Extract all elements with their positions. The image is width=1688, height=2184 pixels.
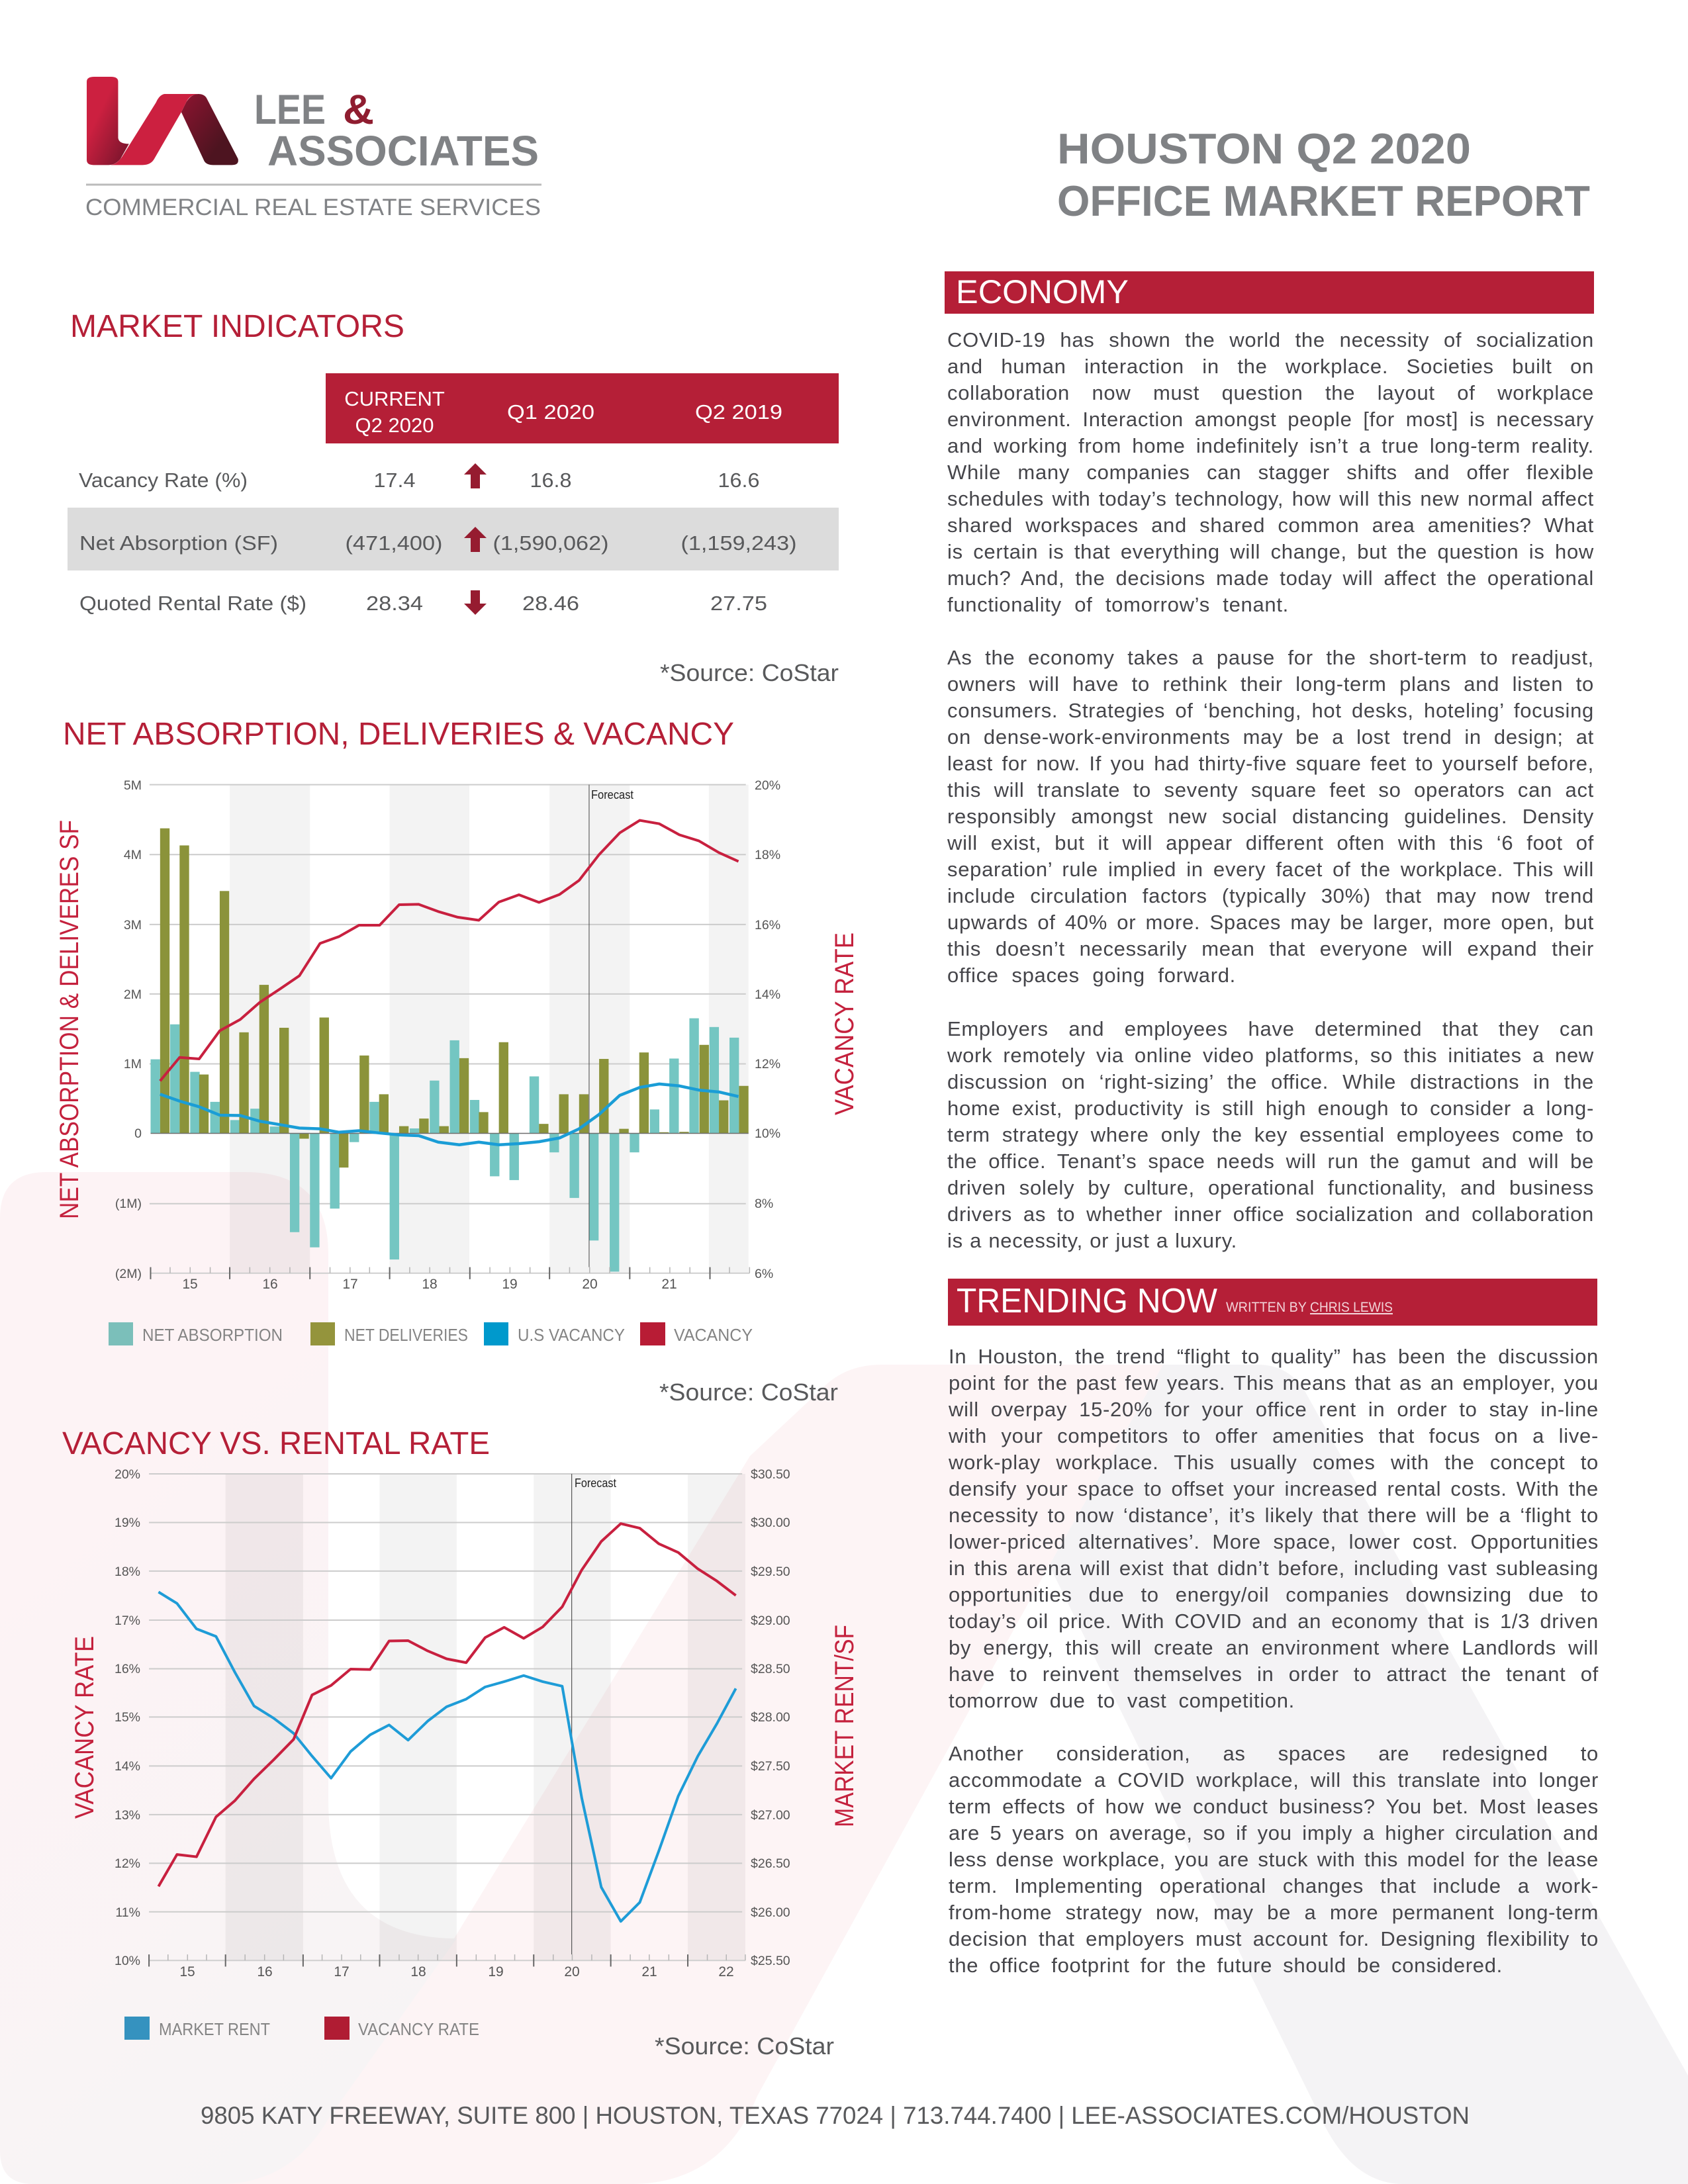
legend: VACANCY [674, 1325, 753, 1345]
text block: economy paragraph 3: term strategy where only the key essential employees come to [947, 1123, 1594, 1146]
left axis labels: 5M [124, 778, 142, 793]
left axis labels: 15% [115, 1710, 140, 1725]
text block: economy paragraph 1: much? And, the decisions made today will affect the operational [947, 567, 1594, 590]
text block: trending now paragraph 2: accommodate a COVID workplace, will this translate into longer [949, 1768, 1599, 1792]
text block: economy paragraph 1: collaboration now must question the layout of workplace [947, 381, 1594, 404]
text block: trending now paragraph 2: Another consideration, as spaces are redesigned to [949, 1742, 1599, 1765]
legend [109, 1322, 753, 1345]
row: net absorption [68, 508, 839, 570]
text block: trending now paragraph 2: term effects of how we conduct business? You bet. Most leases [949, 1795, 1599, 1818]
left axis labels [115, 1467, 140, 1968]
heading: vacancy vs rental rate: VACANCY VS. RENTAL RATE [62, 1426, 490, 1461]
section bar: trending now [948, 1279, 1597, 1326]
year labels: 19 [488, 1964, 504, 1979]
logo: Lee & Associates: COMMERCIAL REAL ESTATE SERVICES [85, 195, 541, 220]
row: quoted rental rate: 28.34 [366, 592, 423, 615]
year labels: 20 [564, 1964, 580, 1979]
row: net absorption: (1,159,243) [680, 531, 797, 555]
text block: economy paragraph 3: discussion on ‘right-sizing’ the office. While distractions in the [947, 1070, 1594, 1093]
right axis labels: $28.50 [751, 1662, 790, 1676]
left axis labels: 1M [124, 1057, 142, 1071]
left axis labels: 12% [115, 1856, 140, 1871]
table header row: Q1 2020 [507, 400, 594, 424]
axis ticks [149, 1954, 745, 1966]
logo: Lee & Associates: ASSOCIATES [267, 127, 539, 175]
text block: trending now paragraph 1: have to reinvent themselves in order to attract the tenant of [949, 1662, 1599, 1686]
row: quoted rental rate: Quoted Rental Rate ($) [79, 592, 306, 615]
section bar: trending now: WRITTEN BY [1226, 1300, 1307, 1315]
text block: trending now paragraph 1: tomorrow due to vast competition. [949, 1689, 1295, 1712]
footer contact line: 9805 KATY FREEWAY, SUITE 800 | HOUSTON, TEXAS 77024 | 713.744.7400 | LEE-ASSOCIATES.COM/HOUSTON [201, 2101, 1470, 2129]
legend: VACANCY RATE [358, 2019, 479, 2039]
source note: chart 1: *Source: CoStar [659, 1379, 838, 1406]
year labels: 18 [410, 1964, 426, 1979]
text block: economy paragraph 1: and working from home indefinitely isn’t a true long-term reality. [947, 434, 1594, 457]
left axis labels: (2M) [115, 1267, 142, 1281]
right axis labels: 10% [755, 1126, 780, 1141]
year labels: 20 [582, 1277, 598, 1292]
text block: economy paragraph 2: separation’ rule implied in every facet of the workplace. This will [947, 858, 1594, 881]
left axis labels: 20% [115, 1467, 140, 1482]
source note: table: *Source: CoStar [660, 659, 839, 686]
left axis labels: 18% [115, 1565, 140, 1579]
chart: net absorption, deliveries and vacancy [55, 778, 859, 1345]
right axis labels: $27.00 [751, 1808, 790, 1823]
year labels: 17 [342, 1277, 358, 1292]
row: net absorption: (1,590,062) [492, 531, 609, 555]
axis title: vacancy rate: VACANCY RATE [70, 1636, 99, 1819]
section bar: trending now: TRENDING NOW [957, 1282, 1217, 1320]
left axis labels: 17% [115, 1614, 140, 1628]
year labels [179, 1964, 734, 1979]
plot area [149, 1474, 745, 1966]
year labels [182, 1277, 677, 1292]
source note: chart 2: *Source: CoStar [655, 2032, 834, 2060]
right axis labels: $28.00 [751, 1710, 790, 1725]
line: vacancy rate [158, 1524, 736, 1886]
right axis labels: 16% [755, 918, 780, 933]
axis title: net absorption and deliveries: NET ABSORPTION & DELIVERES SF [55, 820, 84, 1219]
watermark: pink diagonal [199, 1365, 1163, 2184]
text block: trending now paragraph 1: in this arena will exist that didn’t before, including vast subleasing [949, 1557, 1599, 1580]
watermark: right grey leg [1049, 1365, 1688, 2184]
title: OFFICE MARKET REPORT [1057, 177, 1590, 225]
text block: trending now paragraph 1: will overpay 15-20% for your office rent in order to stay in-line [949, 1398, 1599, 1421]
left axis labels: 13% [115, 1808, 140, 1823]
right axis labels: $25.50 [751, 1954, 790, 1968]
table header row: Q2 2020 [355, 414, 434, 437]
left axis labels: 0 [134, 1126, 142, 1141]
text block: economy paragraph 1: and human interaction in the workplace. Societies built on [947, 355, 1594, 378]
text block: trending now paragraph 1: with your competitors to offer amenities that focus on a live- [949, 1424, 1599, 1447]
right axis labels: $26.50 [751, 1856, 790, 1871]
right axis labels: 14% [755, 987, 780, 1002]
year labels: 15 [182, 1277, 198, 1292]
right axis labels: $30.00 [751, 1516, 790, 1530]
text block: trending now paragraph 2: less dense workplace, you are stuck with this model for the lease [949, 1848, 1599, 1871]
legend [124, 2017, 479, 2040]
logo wordmark: LEE [254, 87, 326, 133]
right axis labels [751, 1467, 790, 1968]
text block: trending now paragraph 2: term. Implementing operational changes that include a work- [949, 1874, 1599, 1897]
year labels: 16 [262, 1277, 278, 1292]
table header row [326, 373, 839, 443]
heading: net absorption chart: NET ABSORPTION, DELIVERIES & VACANCY [63, 717, 734, 752]
row: quoted rental rate: 27.75 [710, 592, 767, 615]
text block: economy paragraph 2: As the economy takes a pause for the short-term to readjust, [947, 646, 1594, 669]
right axis labels: $29.00 [751, 1614, 790, 1628]
line: U.S. vacancy [160, 1084, 739, 1145]
right axis labels: 20% [755, 778, 780, 793]
plot area [150, 785, 749, 1279]
text block: economy paragraph 2 [947, 646, 1594, 987]
text block: economy paragraph 2: responsibly amongst new social distancing guidelines. Density [947, 805, 1594, 828]
right axis labels: 6% [755, 1267, 773, 1281]
table: market indicators [68, 373, 839, 615]
legend: NET DELIVERIES [344, 1325, 468, 1345]
axis title: vacancy rate: VACANCY RATE [830, 933, 859, 1115]
line: vacancy [160, 821, 739, 1081]
text block: economy paragraph 3: Employers and employees have determined that they can [947, 1017, 1594, 1040]
section bar: economy: ECONOMY [956, 273, 1129, 310]
text block: trending now paragraph 2: the office footprint for the future should be considered. [949, 1954, 1503, 1977]
row: vacancy rate [79, 463, 760, 492]
row: vacancy rate: 16.6 [718, 469, 760, 492]
year labels: 22 [718, 1964, 734, 1979]
year labels: 21 [641, 1964, 657, 1979]
text block: economy paragraph 2: upwards of 40% or more. Spaces may be larger, more open, but [947, 911, 1594, 934]
text block: economy paragraph 3 [947, 1017, 1594, 1252]
year labels: 21 [661, 1277, 677, 1292]
row: quoted rental rate [79, 590, 767, 615]
right axis labels: $26.00 [751, 1905, 790, 1920]
text block: economy paragraph 2: office spaces going forward. [947, 964, 1236, 987]
row: quoted rental rate: 28.46 [522, 592, 579, 615]
left axis labels: 3M [124, 918, 142, 933]
right axis labels: 8% [755, 1197, 773, 1211]
text block: economy paragraph 3: work remotely via online video platforms, so this initiates a new [947, 1044, 1594, 1067]
text block: economy paragraph 1: environment. Interaction amongst people [for most] is necessary [947, 408, 1594, 431]
text block: trending now paragraph 1: opportunities due to energy/oil companies downsizing due to [949, 1583, 1599, 1606]
text block: economy paragraph 3: driven solely by culture, operational functionality, and business [947, 1176, 1594, 1199]
text block: economy paragraph 3: is a necessity, or just a luxury. [947, 1229, 1237, 1252]
text block: economy paragraph 3: drivers as to whether inner office socialization and collaboration [947, 1203, 1594, 1226]
forecast label: Forecast [575, 1477, 616, 1490]
row: vacancy rate: Vacancy Rate (%) [79, 469, 248, 492]
year labels: 16 [257, 1964, 273, 1979]
text block: economy paragraph 1: While many companies can stagger shifts and offer flexible [947, 461, 1594, 484]
line: market rent [158, 1592, 736, 1921]
right axis labels: 12% [755, 1057, 780, 1071]
logo: Lee & Associates: & [343, 87, 374, 133]
left axis labels: 11% [115, 1905, 140, 1920]
left axis labels [115, 778, 142, 1281]
bars: net absorption [150, 1019, 739, 1271]
logo: Lee & Associates [85, 77, 541, 220]
text block: economy paragraph 2: on dense-work-environments may be a lost trend in design; at [947, 725, 1594, 749]
table header row: Q2 2019 [695, 400, 782, 424]
left axis labels: 19% [115, 1516, 140, 1530]
table header row: CURRENT [344, 387, 445, 410]
text block: economy paragraph 2: least for now. If you had thirty-five square feet to yourself before, [947, 752, 1594, 775]
icon: logo mark [87, 77, 238, 165]
left axis labels: 4M [124, 848, 142, 862]
left axis labels: 2M [124, 987, 142, 1002]
row: net absorption: Net Absorption (SF) [79, 531, 278, 555]
text block: economy paragraph 3: the office. Tenant’s space needs will run the gamut and will be [947, 1150, 1594, 1173]
row: vacancy rate: 16.8 [530, 469, 572, 492]
text block: economy paragraph 1: COVID-19 has shown the world the necessity of socialization [947, 328, 1594, 351]
text block: economy paragraph 2: will exist, but it will appear different often with this ‘6 foot of [947, 831, 1594, 854]
forecast label: Forecast [591, 788, 633, 801]
text block: trending now paragraph 1: densify your space to offset your increased rental costs. With the [949, 1477, 1599, 1500]
text block: economy paragraph 3: home exist, productivity is still high enough to consider a long- [947, 1097, 1594, 1120]
left axis labels: (1M) [115, 1197, 142, 1211]
chart: vacancy vs rental rate [70, 1467, 859, 2040]
right axis labels: $29.50 [751, 1565, 790, 1579]
text block: economy paragraph 2: consumers. Strategies of ‘benching, hot desks, hoteling’ focusing [947, 699, 1594, 722]
text block: economy paragraph 1: shared workspaces and shared common area amenities? What [947, 514, 1594, 537]
title [1057, 124, 1590, 225]
text block: economy paragraph 2: this will translate to seventy square feet so operators can act [947, 778, 1594, 801]
text block: economy paragraph 2: owners will have to rethink their long-term plans and listen to [947, 672, 1594, 696]
section bar: economy [945, 271, 1594, 314]
right axis labels: 18% [755, 848, 780, 862]
text block: economy paragraph 1: is certain is that everything will change, but the question is how [947, 540, 1594, 563]
legend: NET ABSORPTION [142, 1325, 283, 1345]
text block: trending now paragraph 1: point for the past few years. This means that as an employer, you [949, 1371, 1599, 1394]
text block: economy paragraph 2: this doesn’t necessarily mean that everyone will expand their [947, 937, 1594, 960]
right axis labels: $27.50 [751, 1759, 790, 1774]
year labels: 15 [179, 1964, 195, 1979]
text block: trending now paragraph 2: are 5 years on average, so if you imply a higher circulation and [949, 1821, 1599, 1844]
heading: market indicators: MARKET INDICATORS [70, 309, 404, 344]
text block: trending now paragraph 1: In Houston, the trend “flight to quality” has been the discussion [949, 1345, 1599, 1368]
text block: trending now paragraph 1: lower-priced alternatives’. More space, lower cost. Opportunities [949, 1530, 1599, 1553]
legend: U.S VACANCY [518, 1325, 625, 1345]
text block: trending now paragraph 1: today’s oil price. With COVID and an economy that is 1/3 driven [949, 1610, 1599, 1633]
left axis labels: 14% [115, 1759, 140, 1774]
text block: trending now paragraph 2: decision that employers must account for. Designing flexibility to [949, 1927, 1599, 1950]
text block: economy paragraph 2: include circulation factors (typically 30%) that may now trend [947, 884, 1594, 907]
text block: trending now paragraph 1: by energy, this will create an environment where Landlords will [949, 1636, 1599, 1659]
left axis labels: 16% [115, 1662, 140, 1676]
text block: economy paragraph 1 [947, 328, 1594, 616]
text block: trending now paragraph 1: necessity to now ‘distance’, it’s likely that there will be a ‘flight to [949, 1504, 1599, 1527]
row: net absorption: (471,400) [346, 531, 442, 555]
text block: economy paragraph 1: functionality of tomorrow’s tenant. [947, 593, 1289, 616]
text block: trending now paragraph 1: work-play workplace. This usually comes with the concept to [949, 1451, 1599, 1474]
year labels: 18 [422, 1277, 438, 1292]
year labels: 19 [502, 1277, 518, 1292]
right axis labels: $30.50 [751, 1467, 790, 1482]
axis ticks [150, 1267, 749, 1279]
text block: economy paragraph 1: schedules with today’s technology, how will this new normal affect [947, 487, 1594, 510]
text block: trending now paragraph 2 [949, 1742, 1599, 1977]
left axis labels: 10% [115, 1954, 140, 1968]
row: vacancy rate: 17.4 [373, 469, 416, 492]
text block: trending now paragraph 2: from-home strategy now, may be a more permanent long-term [949, 1901, 1599, 1924]
year labels: 17 [334, 1964, 350, 1979]
legend: MARKET RENT [159, 2019, 270, 2039]
background watermark: giant logo mark [0, 1172, 1688, 2184]
shaded year bands [226, 1474, 745, 1960]
title: HOUSTON Q2 2020 [1057, 124, 1471, 173]
shaded year bands [230, 785, 749, 1273]
bars: net deliveries [160, 829, 749, 1167]
watermark: left L stroke [0, 1172, 457, 2184]
section bar: trending now: CHRIS LEWIS [1310, 1300, 1393, 1315]
axis title: market rent per sf: MARKET RENT/SF [830, 1625, 859, 1827]
right axis labels [755, 778, 780, 1281]
text block: trending now paragraph 1 [949, 1345, 1599, 1712]
